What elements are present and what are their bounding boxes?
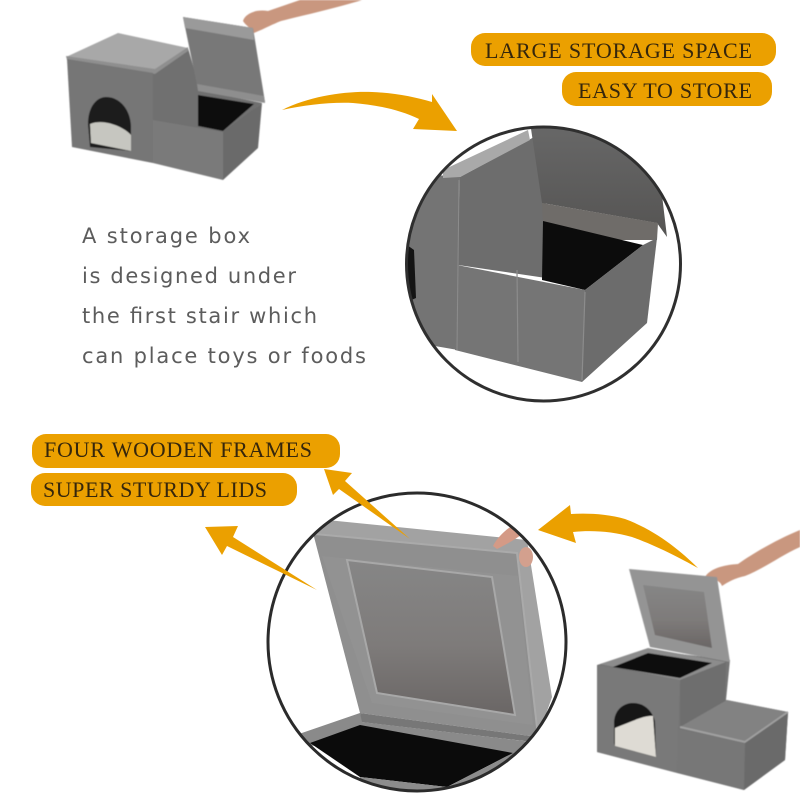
pill: four wooden frames: FOUR WOODEN FRAMES (44, 437, 312, 462)
opened lid (183, 17, 265, 103)
upper stair side (153, 50, 200, 126)
pill: easy to store (562, 72, 772, 106)
pet door (614, 703, 656, 757)
description text: can place toys or foods (82, 344, 366, 368)
upper stair front with door (67, 59, 153, 163)
arrow: to super sturdy lids (205, 526, 317, 590)
arm and hand (705, 530, 800, 586)
pill: large storage space: LARGE STORAGE SPACE (485, 38, 752, 63)
product photo: top storage box with lid open (66, 0, 362, 180)
circle: lid close-up (268, 493, 566, 795)
step side (744, 713, 788, 790)
pill: large storage space (471, 33, 776, 66)
tall box side (680, 662, 726, 727)
storage opening (198, 95, 254, 131)
pill: super sturdy lids (31, 473, 297, 506)
lower box side (223, 103, 262, 180)
description text: A storage box (82, 224, 250, 248)
product photo: bottom storage stairs with lid open (597, 530, 800, 790)
arrow: pointing to storage close-up (282, 92, 457, 131)
step front (677, 729, 745, 790)
back wall and interior rim (153, 48, 262, 134)
pill: easy to store: EASY TO STORE (578, 78, 752, 103)
pet door (88, 97, 131, 151)
arrow: to four wooden frames (324, 469, 410, 539)
upper stair top (66, 33, 188, 74)
silhouette underlay (597, 650, 788, 790)
opened lid (629, 569, 730, 662)
pill: super sturdy lids: SUPER STURDY LIDS (43, 477, 267, 502)
arrow: from product to lid close-up (538, 505, 698, 568)
lower box front (153, 120, 223, 180)
tall box front (597, 665, 680, 773)
step top (680, 700, 788, 742)
description text: the first stair which (82, 304, 317, 328)
arm and hand (243, 0, 362, 33)
description text (82, 224, 366, 368)
circle: storage close-up (400, 122, 680, 401)
inner opening (600, 648, 726, 680)
description text: is designed under (82, 264, 296, 288)
pill: four wooden frames (32, 434, 340, 468)
